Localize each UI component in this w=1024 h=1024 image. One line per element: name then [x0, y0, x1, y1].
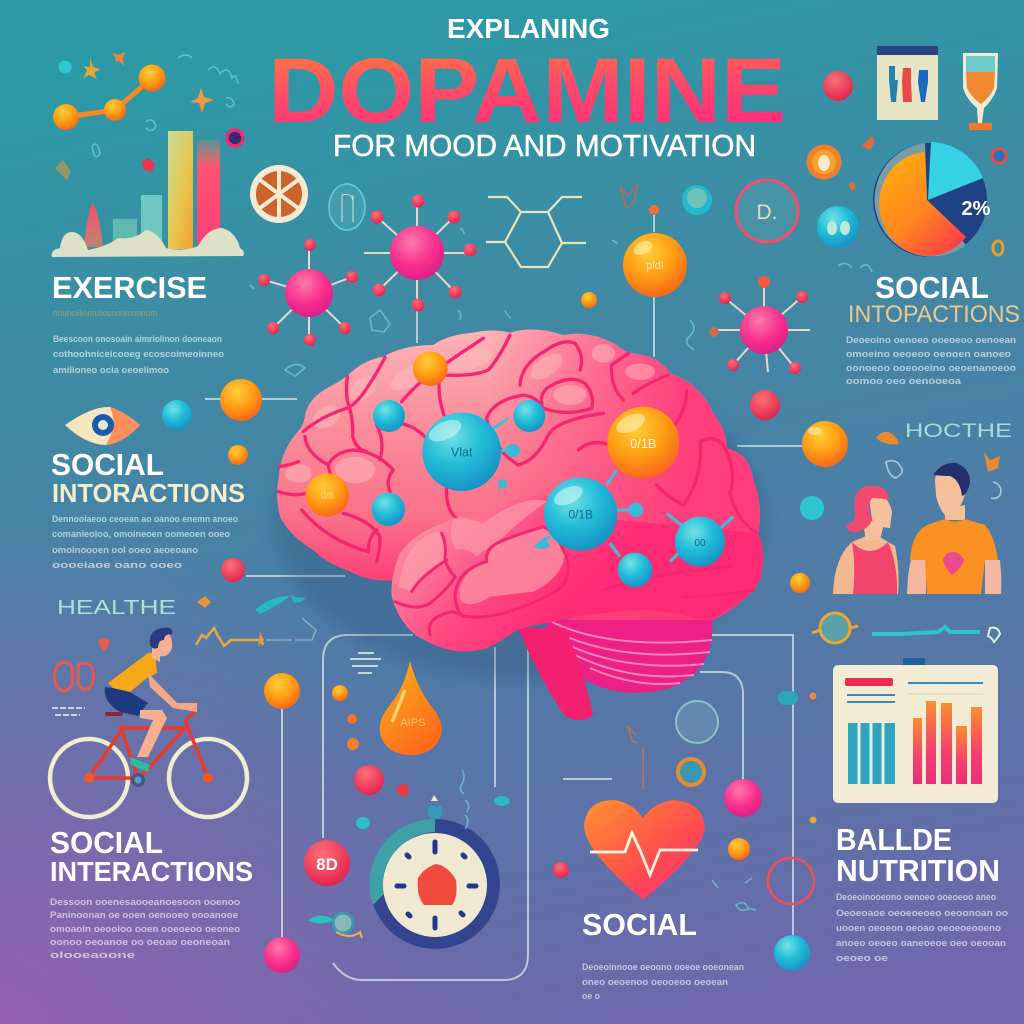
upper lobe highlights	[285, 343, 655, 483]
brain	[270, 320, 770, 720]
brain shadow	[275, 360, 765, 680]
heading: social interactions left: INTORACTIONS	[52, 478, 245, 508]
heading: healthe: HEALTHE	[57, 597, 176, 619]
heading: social bottom: oe o	[582, 991, 600, 1002]
molecules on brain: 0/1B	[630, 437, 656, 451]
heading: balance nutrition: NUTRITION	[836, 853, 1000, 888]
bar chart card	[833, 658, 998, 803]
icon: couple	[833, 463, 1001, 594]
icon: lungs	[52, 638, 110, 715]
small list icon	[350, 653, 381, 673]
ball and heading: hocthe: HOCTHE	[905, 421, 1012, 442]
pie chart	[873, 142, 991, 257]
brain stem	[518, 628, 593, 720]
pie chart: 2%	[962, 198, 991, 220]
heading: healthe	[57, 595, 316, 646]
decorative balls	[162, 185, 824, 973]
heading: social bottom	[582, 907, 744, 1002]
connector lines	[205, 215, 802, 980]
molecule: left	[258, 239, 358, 346]
heading: exercise: amilioneo ocia oeoelimoo	[53, 365, 169, 376]
title: DOPAMINE	[268, 40, 786, 142]
heading: social interactions bottom left: omoaoin oeooioo ooen ooeoeoo oeoneo	[50, 924, 240, 935]
heading: social intopactions right: INTOPACTIONS	[848, 301, 1020, 328]
heading: social interactions left: oooeiaoe oano ooeo	[52, 560, 182, 571]
upper lobe sulci	[278, 335, 757, 562]
icons: small rings	[806, 71, 1006, 255]
heading: social intopactions right: Deoeoino oenoeo ooeoeoo oenoean	[846, 335, 1016, 346]
heading: exercise: cothoohniceicooeg ecoscoimeoinneo	[53, 349, 224, 360]
small doodles	[250, 184, 872, 910]
icon: cyclist	[50, 628, 247, 817]
heading: balance nutrition: oeoeo oe	[836, 953, 888, 964]
heading: social interactions bottom left: oonoo oeoanoe oo oeoao oeoneoan	[50, 937, 230, 948]
ball: orange top	[623, 233, 687, 297]
icon: heart	[584, 800, 705, 900]
heading: social intopactions right: omoeino oeoeoo oeooen oanoeo	[846, 349, 1011, 360]
heading: social intopactions right: SOCIAL	[875, 270, 989, 305]
heading: social interactions left: omoinoooen ool ooeo aeoeoano	[52, 545, 198, 556]
heading: social interactions bottom left: INTERACTIONS	[50, 856, 253, 887]
icon: exercise chart	[52, 52, 244, 257]
ball and heading: hocthe	[802, 421, 1012, 498]
heading: social bottom: Deoeoinnooe oeoono ooeoe ooeonean	[582, 962, 744, 973]
heading: social interactions left: comanieoioo, omoineoen oomeoen ooeo	[52, 529, 230, 540]
molecules on brain: 0/8	[321, 490, 334, 500]
upper lobe	[277, 329, 763, 620]
heading: exercise: Beescoon onosoain aimriolinon dooneaon	[53, 334, 222, 345]
heading: social intopactions right: oonoeoo ooeooeino oeoenanoeoo	[846, 363, 1016, 374]
icon: wheel	[250, 165, 308, 223]
icon: hexagon	[486, 197, 586, 267]
icon: timer	[370, 795, 500, 949]
lower lobe	[391, 495, 763, 651]
heading: social interactions bottom left: SOCIAL	[50, 825, 163, 860]
heading: balance nutrition: uooen oeoeon oeoao oeoeoeooeno	[836, 923, 1001, 934]
molecules on brain: 0/1B	[568, 508, 593, 522]
molecules on brain: 00	[694, 538, 706, 549]
heading: social interactions bottom left	[50, 825, 253, 961]
lower lobe sulci	[395, 527, 753, 635]
icon: drop: AIPS	[400, 717, 426, 729]
icon: ring and pulse line	[812, 613, 1000, 643]
icon: poster card	[877, 46, 938, 120]
icon: glass circle	[329, 184, 365, 230]
heading: social interactions left: SOCIAL	[51, 447, 164, 482]
cerebellum	[545, 620, 712, 693]
heading: exercise: EXERCISE	[52, 270, 207, 305]
heading: social interactions left	[51, 447, 245, 571]
molecule: right	[709, 276, 810, 374]
heading: balance nutrition: Deoeoinooeono oenoeo ooeoeoo aneo	[836, 892, 996, 903]
heading: social bottom: SOCIAL	[582, 907, 697, 942]
heading: social intopactions right	[846, 270, 1020, 387]
icon: lens knob	[311, 913, 362, 938]
heading: social interactions left: Dennooiaeoo ceoean ao oanoo enemn anoeo	[52, 514, 238, 525]
heading: social intopactions right: oomoo oeo oenooeoa	[846, 376, 962, 387]
heading: exercise	[52, 270, 224, 376]
molecule: centre	[364, 194, 476, 312]
heading: balance nutrition: Oeoeoaoe oeoeoeoeo oeoonoan oo	[836, 908, 1008, 919]
heading: social bottom: oneo oeoenoo oeooeoo oeoean	[582, 977, 728, 988]
heading: social interactions bottom left: Dessoon ooenesaooeanoesoon ooenoo	[50, 897, 240, 908]
icon: glass	[963, 53, 998, 130]
heading: balance nutrition: anoeo oeoeo oaneoeoe oeo oeooan	[836, 938, 1006, 949]
heading: social interactions bottom left: olooeaoone	[50, 950, 135, 961]
heading: balance nutrition	[836, 822, 1008, 964]
ball: orange top: pldI	[646, 260, 664, 272]
heading: social interactions bottom left: Paninoonan oe ooen oenooeo oooanooe	[50, 910, 238, 921]
molecules on brain: Vlat	[451, 446, 473, 460]
title: FOR MOOD AND MOTIVATION	[333, 128, 756, 163]
icon: drop	[380, 661, 442, 755]
heading: balance nutrition: BALLDE	[836, 822, 952, 857]
ball: 8D: 8D	[316, 855, 338, 874]
ball: 8D	[304, 840, 350, 886]
icon: eye	[65, 407, 140, 445]
heading: exercise: oounoillinmuiiosooomoonum	[53, 308, 157, 318]
lower lobe highlights	[460, 527, 565, 604]
title	[268, 13, 786, 163]
ring: D	[736, 180, 798, 242]
molecules on brain	[306, 351, 733, 587]
title: EXPLANING	[447, 13, 610, 44]
ring: D: D.	[756, 201, 778, 224]
